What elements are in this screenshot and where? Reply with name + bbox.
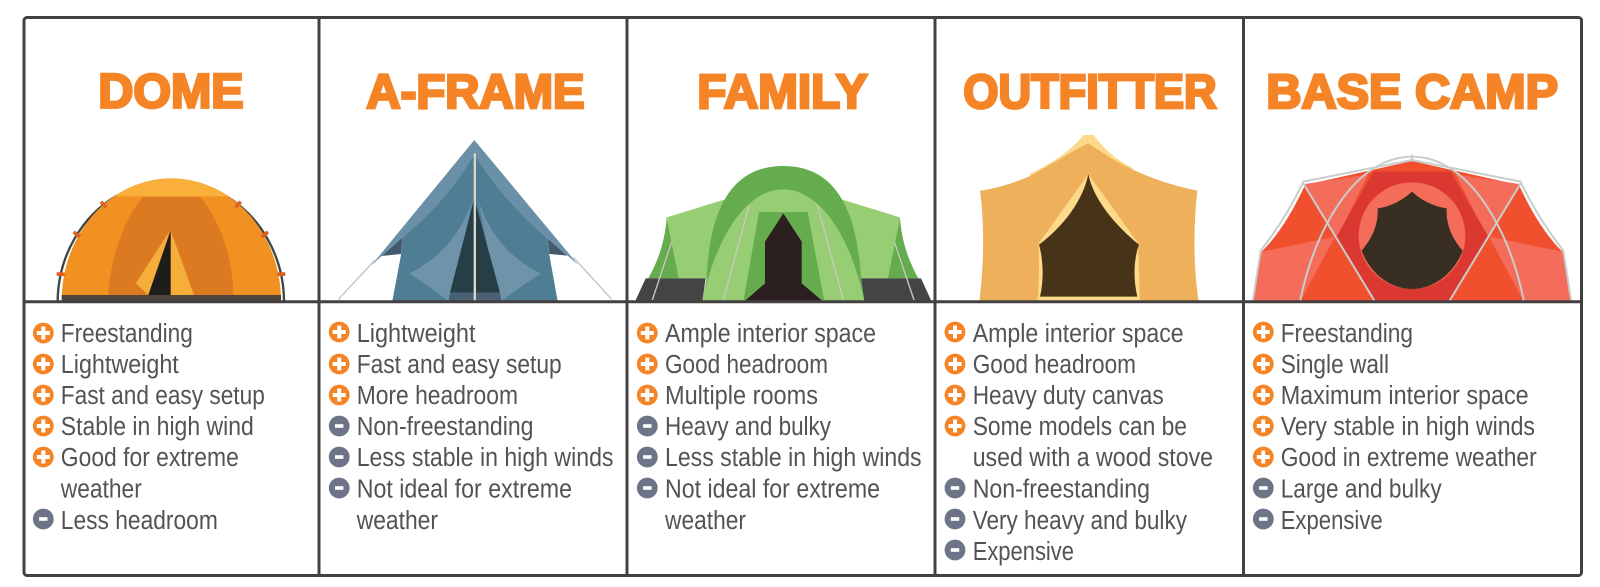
item: Expensive: Expensive <box>1281 507 1383 535</box>
item: Good for extreme weather <box>33 444 239 504</box>
item: Less headroom: Less headroom <box>61 507 218 535</box>
item: Stable in high wind: Stable in high wind <box>61 413 254 441</box>
item: Good in extreme weather: Good in extreme weather <box>1281 444 1537 472</box>
item: Ample interior space: Ample interior space <box>973 320 1184 348</box>
item: Very stable in high winds: Very stable in high winds <box>1281 413 1535 441</box>
item: Fast and easy setup: Fast and easy setup <box>61 382 265 410</box>
heading: family: FAMILY <box>697 66 868 119</box>
item: Not ideal for extreme weather <box>637 476 880 535</box>
item: Not ideal for extreme weather <box>329 476 572 535</box>
item: Some models can be used with a wood stove: used with a wood stove <box>973 444 1213 472</box>
item: Good for extreme weather: weather <box>60 476 142 504</box>
item: Ample interior space: Ample interior space <box>665 320 876 348</box>
heading: outfitter: OUTFITTER <box>963 66 1217 119</box>
item: Not ideal for extreme weather: Not ideal for extreme <box>665 476 880 504</box>
item: Lightweight: Lightweight <box>357 320 476 348</box>
list: a-frame pros and cons <box>329 320 614 535</box>
icon: dome tent <box>57 178 285 302</box>
list: dome pros and cons <box>33 320 265 535</box>
item: Maximum interior space: Maximum interior space <box>1281 382 1529 410</box>
item: Multiple rooms: Multiple rooms <box>665 382 818 410</box>
item: Freestanding: Freestanding <box>1281 320 1413 348</box>
item: Some models can be used with a wood stove <box>945 413 1213 472</box>
item: Single wall: Single wall <box>1281 351 1389 379</box>
item: Not ideal for extreme weather: weather <box>664 507 746 535</box>
item: More headroom: More headroom <box>357 382 518 410</box>
panel: outfitter tent <box>945 66 1217 566</box>
item: Expensive <box>945 538 1074 566</box>
item: Heavy duty canvas: Heavy duty canvas <box>973 382 1164 410</box>
heading: base camp: BASE CAMP <box>1266 66 1558 119</box>
item: Expensive: Expensive <box>973 538 1074 566</box>
panel: family tent <box>635 66 932 535</box>
item: Less stable in high winds: Less stable in high winds <box>357 444 614 472</box>
list: base camp pros and cons <box>1253 320 1537 535</box>
icon: base camp tent <box>1253 154 1571 302</box>
item: Not ideal for extreme weather: Not ideal for extreme <box>357 476 572 504</box>
item: Non-freestanding: Non-freestanding <box>973 476 1150 504</box>
icon: outfitter tent <box>979 135 1199 302</box>
heading: dome: DOME <box>98 66 244 118</box>
item: Fast and easy setup: Fast and easy setup <box>357 351 562 379</box>
panel: base camp tent <box>1253 66 1571 535</box>
item: Non-freestanding: Non-freestanding <box>357 413 534 441</box>
icon: family tent <box>635 166 932 302</box>
item: Very heavy and bulky: Very heavy and bulky <box>973 507 1187 535</box>
item: Lightweight: Lightweight <box>61 351 179 379</box>
item: Heavy and bulky: Heavy and bulky <box>665 413 831 441</box>
item: Large and bulky: Large and bulky <box>1281 476 1442 504</box>
item: Not ideal for extreme weather: weather <box>356 507 438 535</box>
item: Good headroom: Good headroom <box>665 351 828 379</box>
heading: a-frame: A-FRAME <box>366 66 585 119</box>
item: Freestanding: Freestanding <box>61 320 193 348</box>
item: Good for extreme weather: Good for extreme <box>61 444 239 472</box>
item: Good headroom: Good headroom <box>973 351 1136 379</box>
item: Less stable in high winds: Less stable in high winds <box>665 444 922 472</box>
list: outfitter pros and cons <box>945 320 1213 566</box>
list: family pros and cons <box>637 320 922 535</box>
item: Some models can be used with a wood stove: Some models can be <box>973 413 1187 441</box>
panel: a-frame tent <box>329 66 614 535</box>
icon: a-frame tent <box>339 140 612 302</box>
panel: dome tent <box>33 66 285 535</box>
